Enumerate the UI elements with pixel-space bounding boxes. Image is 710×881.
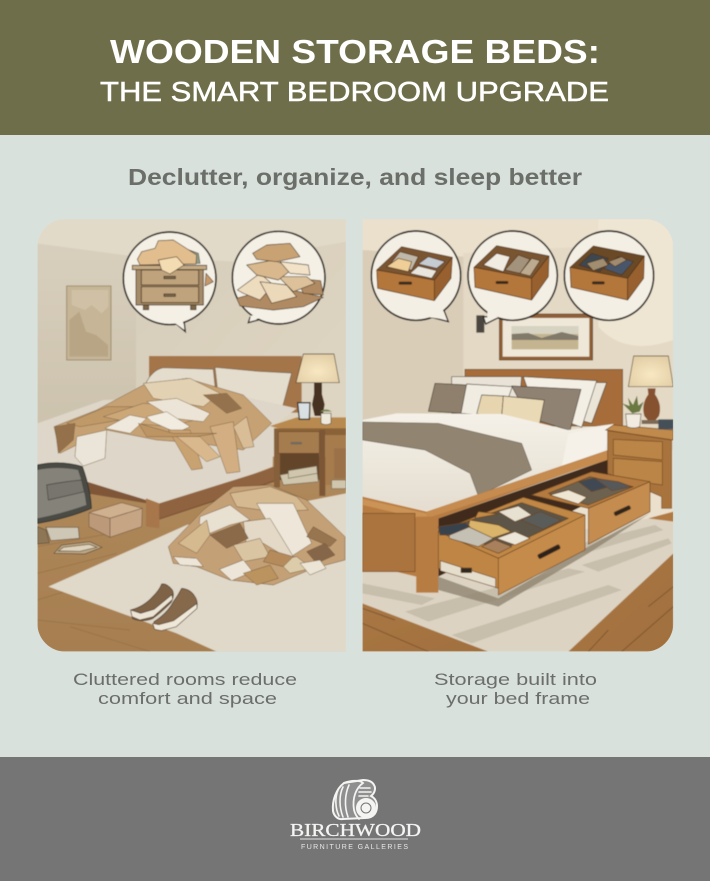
thought bubble: dark clothes drawer (564, 231, 654, 320)
floor books (37, 527, 102, 554)
pillows (428, 377, 607, 431)
thought bubble: messy dresser (123, 232, 216, 332)
thought bubble: folded clothes drawer (371, 231, 461, 322)
headboard (149, 356, 302, 413)
thought bubble: rolled clothes drawer (468, 231, 557, 324)
books on shelf (280, 466, 346, 489)
panel: cluttered bedroom illustration (37, 219, 346, 652)
caption: cluttered rooms: comfort and space (98, 689, 277, 708)
bed frame (362, 450, 609, 593)
header band (0, 0, 710, 135)
caption: cluttered rooms (73, 670, 297, 708)
room walls (362, 250, 464, 420)
wood floor (37, 457, 346, 652)
caption: cluttered rooms: Cluttered rooms reduce (73, 670, 297, 689)
clothes pile on rug (168, 485, 345, 585)
nightstand (606, 425, 673, 508)
wall sconce (476, 315, 484, 333)
drawer shadow on rug (438, 513, 650, 607)
clothes on dresser (137, 240, 213, 286)
caption: storage built in: your bed frame (446, 689, 590, 708)
pillows (145, 367, 292, 410)
logo mark: log (333, 780, 377, 819)
wall art (67, 286, 111, 360)
nightstand (270, 417, 346, 496)
wall art frame (499, 314, 593, 360)
wood floor (362, 512, 673, 652)
mattress (362, 412, 614, 495)
rug (48, 493, 346, 652)
backpack (37, 463, 91, 523)
headboard (465, 369, 623, 426)
bed sheets (37, 397, 297, 507)
storage box (89, 503, 142, 537)
room walls (38, 242, 345, 424)
bed base (87, 467, 275, 528)
lamp (628, 356, 673, 429)
panel: organized storage bed illustration (362, 219, 673, 652)
caption: storage built in (434, 670, 597, 708)
title line 2: THE SMART BEDROOM UPGRADE (100, 76, 609, 107)
dresser (132, 265, 207, 310)
tablet and mug (298, 403, 332, 425)
logo wordmark: BIRCHWOOD (290, 820, 421, 840)
potted plant (622, 396, 644, 428)
footer band (0, 757, 710, 881)
clothes on bed (54, 378, 272, 473)
thought bubble: clothes pile (232, 231, 325, 324)
front drawer (438, 497, 585, 595)
logo tagline: FURNITURE GALLERIES (301, 844, 408, 851)
caption: storage built in: Storage built into (434, 670, 597, 689)
rear drawer (532, 472, 650, 544)
table lamp (296, 354, 339, 416)
throw blanket (362, 422, 532, 496)
sneakers (131, 584, 197, 631)
subtitle: Declutter, organize, and sleep better (128, 164, 582, 190)
striped rug (362, 518, 673, 652)
title line 1: WOODEN STORAGE BEDS: (110, 33, 600, 70)
